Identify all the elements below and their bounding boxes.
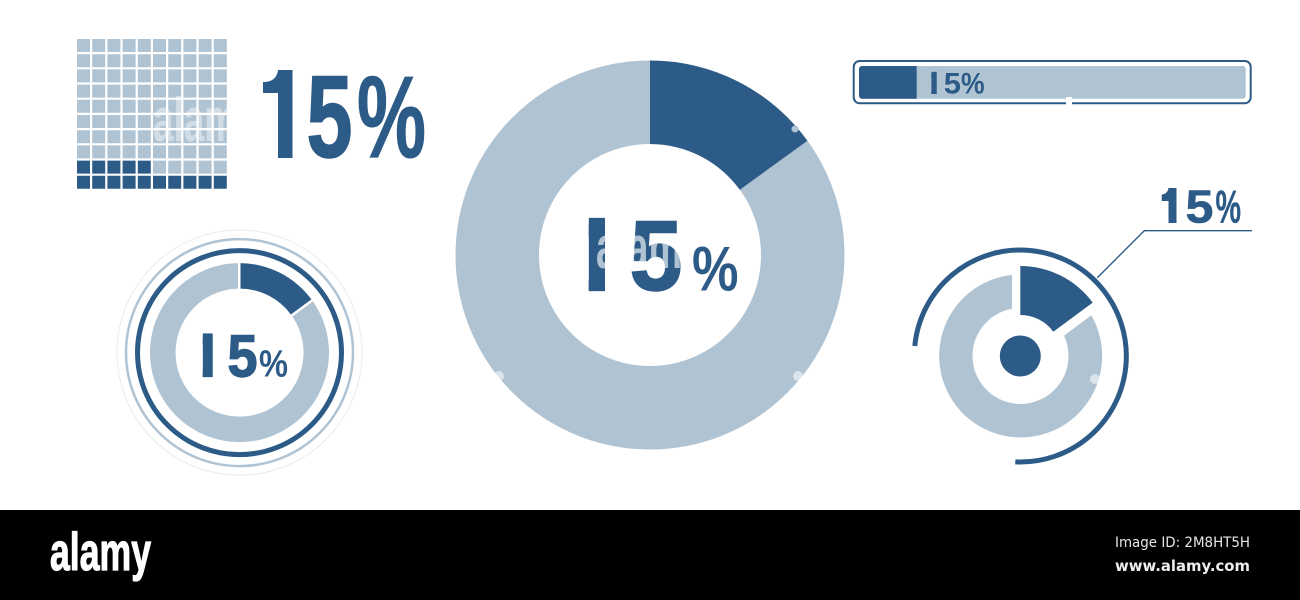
faint outer ring <box>117 230 362 475</box>
exploded 15% slice <box>1020 266 1093 332</box>
callout 15% label: 1 <box>1160 180 1182 233</box>
bar 15% label <box>931 72 984 94</box>
left 15% label: 1 <box>193 322 227 391</box>
bar fill 15% <box>859 66 917 99</box>
bar track <box>859 66 1246 99</box>
center 15% label: 5 <box>630 200 682 310</box>
center 15% label: % <box>692 234 738 304</box>
bar 15% label: 1 <box>926 66 943 101</box>
footer logo: alamy <box>50 523 151 582</box>
center dot <box>1000 336 1041 376</box>
outer arc <box>915 250 1126 462</box>
panel: left ringed donut chart <box>117 230 362 475</box>
watermark speck <box>1090 374 1100 384</box>
light outer ring <box>126 239 353 466</box>
large 15% label: 1 <box>258 50 305 184</box>
watermark specks on donut <box>494 126 803 381</box>
watermark over center label: alam <box>596 214 682 281</box>
panel: waffle chart with 15% <box>77 46 426 184</box>
bar frame <box>854 61 1251 103</box>
panel: center donut chart <box>494 60 807 408</box>
left 15% label: % <box>259 343 288 385</box>
dark ring <box>138 251 342 455</box>
panel: right donut with callout <box>915 180 1252 462</box>
callout 15% label: % <box>1216 180 1241 232</box>
callout leader line <box>1097 231 1252 278</box>
watermark under bar <box>1066 97 1072 105</box>
footer website: www.alamy.com <box>1115 557 1250 575</box>
callout 15% label: 5 <box>1186 180 1214 232</box>
center 15% label: 1 <box>572 198 630 314</box>
large 15% label: % <box>357 52 426 182</box>
footer image id: Image ID: 2M8HT5H <box>1115 535 1250 551</box>
footer band <box>0 510 1300 600</box>
watermark over waffle: alam <box>153 86 237 155</box>
bar 15% label: % <box>961 68 985 101</box>
donut remainder <box>939 275 1102 437</box>
left 15% label: 5 <box>228 323 258 389</box>
callout 15% label <box>1162 188 1240 224</box>
donut remainder <box>150 263 329 442</box>
bar 15% label: 5 <box>944 68 961 101</box>
center 15% label <box>588 218 738 292</box>
left 15% label <box>202 333 288 378</box>
donut 15% slice <box>650 60 807 190</box>
large 15% label: 5 <box>306 51 352 182</box>
donut remainder ring <box>497 102 803 408</box>
waffle grid of 100 squares <box>77 46 227 182</box>
donut 15% slice <box>240 263 311 314</box>
panel: progress bar <box>854 61 1251 105</box>
large 15% label <box>263 70 424 159</box>
